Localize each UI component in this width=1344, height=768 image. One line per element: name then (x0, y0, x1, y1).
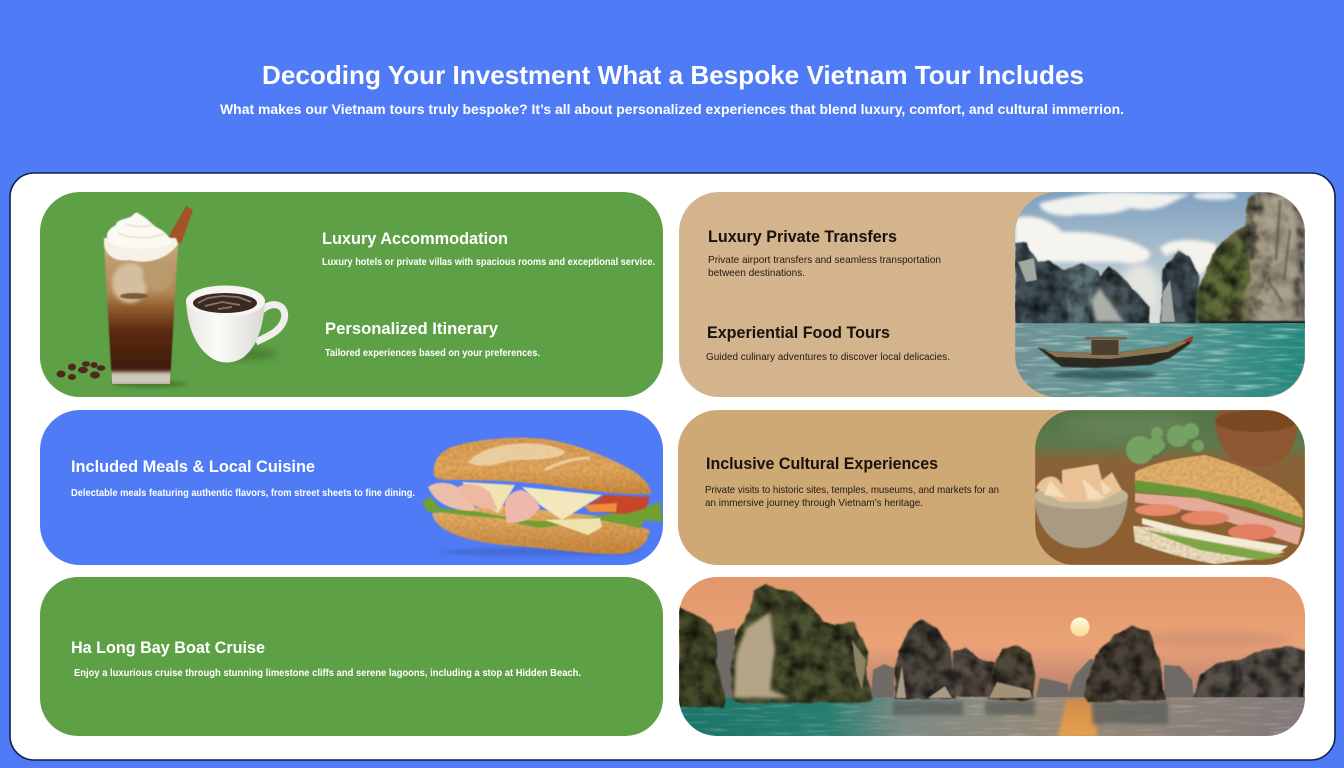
text block: luxury private transfers (708, 227, 941, 279)
title: Decoding Your Investment What a Bespoke Vietnam Tour Includes (262, 60, 1084, 90)
sun (1070, 618, 1090, 636)
sea (1015, 323, 1305, 398)
text block: included meals and local cuisine (71, 457, 415, 499)
panel: inclusive cultural experiences (678, 410, 1305, 565)
wooden bowl (1215, 410, 1298, 467)
text block: experiential food tours: Guided culinary adventures to discover local delicacies. (706, 351, 950, 363)
text block: personalized itinerary: Tailored experiences based on your preferences. (325, 347, 540, 359)
text block: ha long bay boat cruise: Ha Long Bay Boat Cruise (71, 638, 265, 657)
text block: luxury accommodation (322, 229, 655, 268)
distant islands (716, 628, 1194, 698)
text block: experiential food tours (706, 323, 950, 363)
icon: baguette sandwich (422, 438, 663, 556)
text block: luxury private transfers: between destinations. (708, 267, 805, 279)
text block: personalized itinerary: Personalized Itinerary (325, 319, 499, 338)
stone bowl with pickles (1034, 464, 1128, 548)
text block: personalized itinerary (325, 319, 540, 359)
panel: included meals (40, 410, 663, 565)
limestone rocks (679, 585, 1166, 707)
text block: luxury accommodation: Luxury hotels or private villas with spacious rooms and exceptional service. (322, 256, 655, 268)
text block: luxury private transfers: Luxury Private Transfers (708, 227, 897, 246)
right cliff (1197, 192, 1305, 328)
sea (679, 697, 1305, 737)
icon: iced coffee glass (100, 206, 193, 388)
text block: ha long bay boat cruise: Enjoy a luxurious cruise through stunning limestone cliffs and serene lagoons, including a stop at Hidden Beach. (74, 667, 581, 679)
text block: inclusive cultural experiences (705, 454, 999, 509)
header (220, 60, 1124, 117)
text block: inclusive cultural experiences: Inclusive Cultural Experiences (706, 454, 938, 473)
text block: experiential food tours: Experiential Food Tours (707, 323, 890, 342)
photo: limestone bay with wooden boat (1015, 192, 1305, 398)
subtitle: What makes our Vietnam tours truly bespoke? It’s all about personalized experiences that blend luxury, comfort, and cultural immerrion. (220, 101, 1124, 117)
text block: included meals and local cuisine: Included Meals & Local Cuisine (71, 457, 315, 476)
icon: coffee beans (56, 361, 105, 380)
icon: cup of coffee beans (186, 286, 285, 362)
photo: sandwich with pickles and herbs (1034, 410, 1305, 565)
photo: ha long bay at sunset (679, 577, 1305, 737)
boat (1037, 336, 1193, 380)
text block: inclusive cultural experiences: Private visits to historic sites, temples, museums, and markets for an (705, 484, 999, 496)
panel: private transfers and food tours (679, 192, 1305, 398)
panel: ha long bay boat cruise (40, 577, 663, 736)
text block: luxury accommodation: Luxury Accommodation (322, 229, 508, 248)
main white container (10, 173, 1335, 760)
coriander (1126, 423, 1204, 464)
panel: accommodation and itinerary (40, 192, 663, 397)
text block: luxury private transfers: Private airport transfers and seamless transportation (708, 254, 941, 266)
text block: inclusive cultural experiences: an immersive journey through Vietnam’s heritage. (705, 497, 923, 509)
sandwich (1133, 455, 1303, 564)
text block: included meals and local cuisine: Delectable meals featuring authentic flavors, from street sheets to fine dining. (71, 487, 415, 499)
text block: ha long bay boat cruise (71, 638, 581, 679)
